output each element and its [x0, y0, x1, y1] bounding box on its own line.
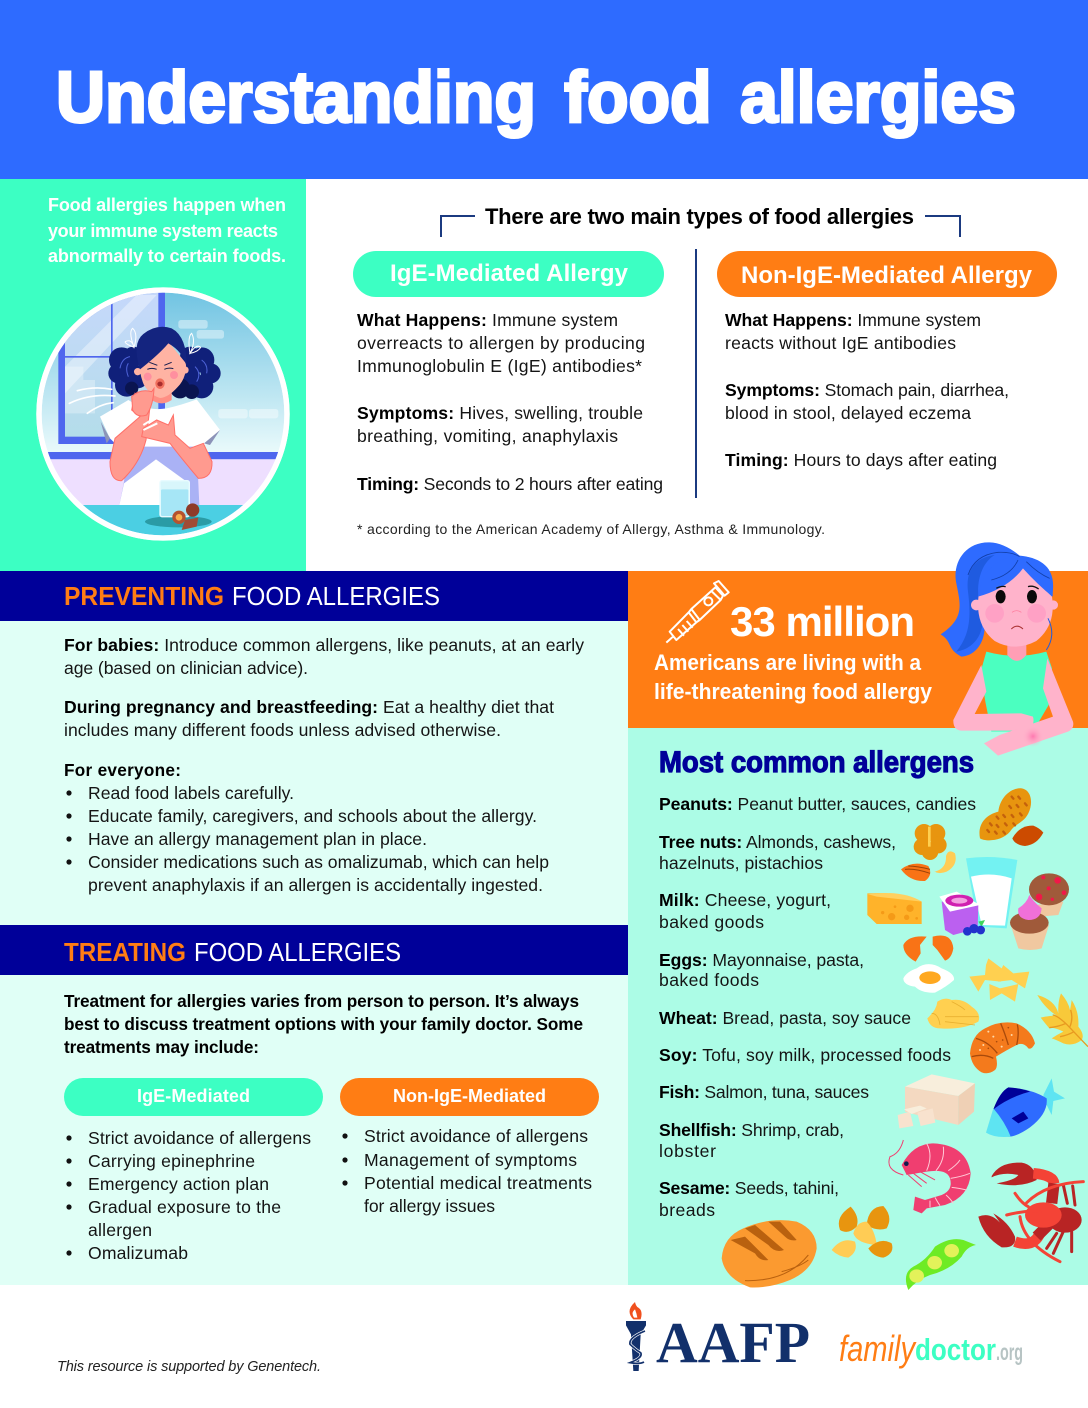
- pasta: [927, 958, 1029, 1029]
- logo: familydoctor.org: family: [839, 1328, 917, 1369]
- treating intro: best to discuss treatment options with your family doctor. Some: [64, 1014, 583, 1034]
- non-IgE details: Timing: Hours to days after eating: [725, 450, 997, 470]
- preventing text: [64, 635, 584, 780]
- stat text: Americans are living with a: [654, 650, 922, 675]
- allergens list: baked goods: [659, 912, 764, 932]
- IgE details: Timing: Seconds to 2 hours after eating: [357, 474, 663, 494]
- header band: [0, 0, 1088, 179]
- allergens list: breads: [659, 1200, 715, 1220]
- allergens list: Sesame: Seeds, tahini,: [659, 1178, 839, 1198]
- non-IgE treatment list: Strict avoidance of allergens: [364, 1126, 588, 1146]
- non-IgE details: [725, 310, 1009, 470]
- treating heading: [0, 925, 628, 975]
- preventing heading: PREVENTING: [64, 581, 224, 611]
- preventing heading: FOOD ALLERGIES: [232, 581, 440, 611]
- pill: non-IgE-mediated treatment: Non-IgE-Mediated: [393, 1086, 546, 1106]
- IgE treatment list: Strict avoidance of allergens: [88, 1128, 311, 1148]
- preventing text: age (based on clinician advice).: [64, 658, 308, 678]
- pill: IgE-mediated treatment: [64, 1078, 323, 1116]
- IgE details: [357, 310, 663, 494]
- IgE treatment list: Gradual exposure to the: [88, 1197, 281, 1217]
- pill: IgE-mediated: [353, 251, 664, 297]
- non-IgE details: Symptoms: Stomach pain, diarrhea,: [725, 380, 1009, 400]
- pill: non-IgE-mediated: Non-IgE-Mediated Allergy: [741, 262, 1033, 289]
- column: IgE-mediated allergy: [353, 251, 664, 494]
- edamame: [906, 1239, 976, 1290]
- preventing heading: [0, 571, 628, 621]
- logo: familydoctor.org: .org: [996, 1339, 1023, 1365]
- non-IgE details: reacts without IgE antibodies: [725, 333, 956, 353]
- lobster: [978, 1163, 1083, 1262]
- illustration: woman with rash: [941, 542, 1073, 756]
- sesame seeds: [832, 1206, 892, 1258]
- logo: familydoctor.org: [839, 1328, 1023, 1369]
- wheat: [1037, 993, 1088, 1047]
- IgE treatment list: Emergency action plan: [88, 1174, 269, 1194]
- allergens list: Soy: Tofu, soy milk, processed foods: [659, 1045, 951, 1065]
- pill: non-IgE-mediated: [717, 251, 1057, 297]
- intro text: your immune system reacts: [48, 221, 278, 241]
- peanuts: [979, 788, 1043, 846]
- icon: syringe: [666, 581, 729, 643]
- heading: two main types: [441, 204, 960, 237]
- shrimp: [889, 1140, 971, 1213]
- intro text: Food allergies happen when: [48, 195, 286, 215]
- allergens list: Peanuts: Peanut butter, sauces, candies: [659, 794, 976, 814]
- IgE details: overreacts to allergen by producing: [357, 333, 645, 353]
- panel: 33 million statistic: [628, 571, 1088, 728]
- preventing bullets: prevent anaphylaxis if an allergen is accidentally ingested.: [88, 875, 543, 895]
- non-IgE details: What Happens: Immune system: [725, 310, 981, 330]
- intro text: abnormally to certain foods.: [48, 246, 286, 266]
- IgE treatment list: allergen: [88, 1220, 152, 1240]
- shirt: [100, 399, 220, 480]
- allergens list: Milk: Cheese, yogurt,: [659, 890, 831, 910]
- preventing bullets: Educate family, caregivers, and schools about the allergy.: [88, 806, 537, 826]
- arms: [953, 665, 1034, 731]
- illustration: soy, seafood, bread and sesame foods: [722, 1074, 1083, 1290]
- intro text: [48, 195, 286, 266]
- footnote: * according to the American Academy of Allergy, Asthma & Immunology.: [357, 521, 825, 537]
- tree nuts: [901, 824, 956, 881]
- allergens list: Eggs: Mayonnaise, pasta,: [659, 950, 864, 970]
- panel: intro: [0, 179, 306, 571]
- face: [134, 368, 141, 375]
- non-IgE treatment list: [342, 1126, 592, 1216]
- shoulders and shirt: [981, 652, 1052, 732]
- ribbons: [125, 328, 201, 353]
- allergens list: Wheat: Bread, pasta, soy sauce: [659, 1008, 911, 1028]
- glass and nuts: [160, 481, 189, 517]
- pill: IgE-mediated treatment: IgE-Mediated: [137, 1086, 250, 1106]
- stat text: life-threatening food allergy: [654, 679, 933, 704]
- torch icon: [626, 1302, 646, 1371]
- eggs: [903, 936, 954, 993]
- logo: AAFP: AAFP: [656, 1310, 810, 1375]
- allergens list: Shellfish: Shrimp, crab,: [659, 1120, 844, 1140]
- pill: IgE-mediated: IgE-Mediated Allergy: [390, 260, 629, 287]
- preventing bullets: Read food labels carefully.: [88, 783, 294, 803]
- neck: [1007, 642, 1026, 661]
- bread: [722, 1220, 817, 1287]
- IgE treatment list: Omalizumab: [88, 1243, 188, 1263]
- neck: [152, 388, 172, 403]
- non-IgE treatment list: for allergy issues: [364, 1196, 495, 1216]
- preventing bullets: Consider medications such as omalizumab, which can help: [88, 852, 549, 872]
- allergens heading: Most common allergens: [659, 746, 974, 779]
- treating intro: treatments may include:: [64, 1037, 259, 1057]
- fringe: [137, 327, 187, 369]
- edamame beans: [909, 1244, 959, 1283]
- logo: familydoctor.org: doctor: [915, 1332, 996, 1367]
- allergens list: baked foods: [659, 970, 759, 990]
- illustration: wheat and croissant: [970, 993, 1088, 1073]
- treating heading: TREATING: [64, 937, 186, 967]
- IgE details: breathing, vomiting, anaphylaxis: [357, 426, 618, 446]
- footer note: This resource is supported by Genentech.: [57, 1359, 321, 1375]
- IgE details: Immunoglobulin E (IgE) antibodies*: [357, 356, 642, 376]
- preventing text: During pregnancy and breastfeeding: Eat a healthy diet that: [64, 697, 554, 717]
- title: Understanding food allergies: [56, 58, 1016, 138]
- heading: two main types: There are two main types of food allergies: [485, 204, 914, 229]
- preventing bullets: Have an allergy management plan in place.: [88, 829, 427, 849]
- stat number: 33 million: [730, 598, 915, 645]
- allergens list: [659, 794, 976, 1220]
- treating heading: FOOD ALLERGIES: [194, 937, 401, 967]
- IgE details: Symptoms: Hives, swelling, trouble: [357, 403, 643, 423]
- panel: treating food allergies: [0, 925, 628, 1285]
- face: [978, 567, 1053, 647]
- croissant: [970, 1022, 1035, 1073]
- pill: non-IgE-mediated treatment: [340, 1078, 599, 1116]
- illustration: coughing woman: [33, 287, 293, 548]
- milk and dairy: [867, 857, 1069, 950]
- non-IgE treatment list: Management of symptoms: [364, 1150, 577, 1170]
- IgE treatment list: Carrying epinephrine: [88, 1151, 255, 1171]
- preventing text: For babies: Introduce common allergens, like peanuts, at an early: [64, 635, 584, 655]
- allergens list: lobster: [659, 1141, 716, 1161]
- preventing bullets: [66, 783, 549, 895]
- treating intro: Treatment for allergies varies from person to person. It’s always: [64, 991, 579, 1011]
- panel: preventing food allergies: [0, 571, 628, 925]
- stat text: [654, 650, 933, 704]
- eyes: [996, 590, 1006, 603]
- curly hair: [108, 347, 221, 398]
- non-IgE details: blood in stool, delayed eczema: [725, 403, 971, 423]
- arms: [110, 393, 150, 481]
- panel: most common allergens: [628, 728, 1088, 1285]
- allergens list: hazelnuts, pistachios: [659, 853, 823, 873]
- allergens list: Fish: Salmon, tuna, sauces: [659, 1082, 869, 1102]
- illustration: peanut, tree nut, milk, egg and wheat foods: [867, 788, 1069, 1029]
- preventing text: For everyone:: [64, 760, 181, 780]
- column: non-IgE-mediated allergy: [717, 251, 1057, 470]
- IgE details: What Happens: Immune system: [357, 310, 618, 330]
- tofu: [898, 1074, 975, 1128]
- preventing text: includes many different foods unless advised otherwise.: [64, 720, 501, 740]
- non-IgE treatment list: Potential medical treatments: [364, 1173, 592, 1193]
- fish: [986, 1078, 1065, 1137]
- IgE treatment list: [66, 1128, 311, 1263]
- treating intro: [64, 991, 583, 1057]
- allergens list: Tree nuts: Almonds, cashews,: [659, 832, 896, 852]
- head: [108, 327, 221, 403]
